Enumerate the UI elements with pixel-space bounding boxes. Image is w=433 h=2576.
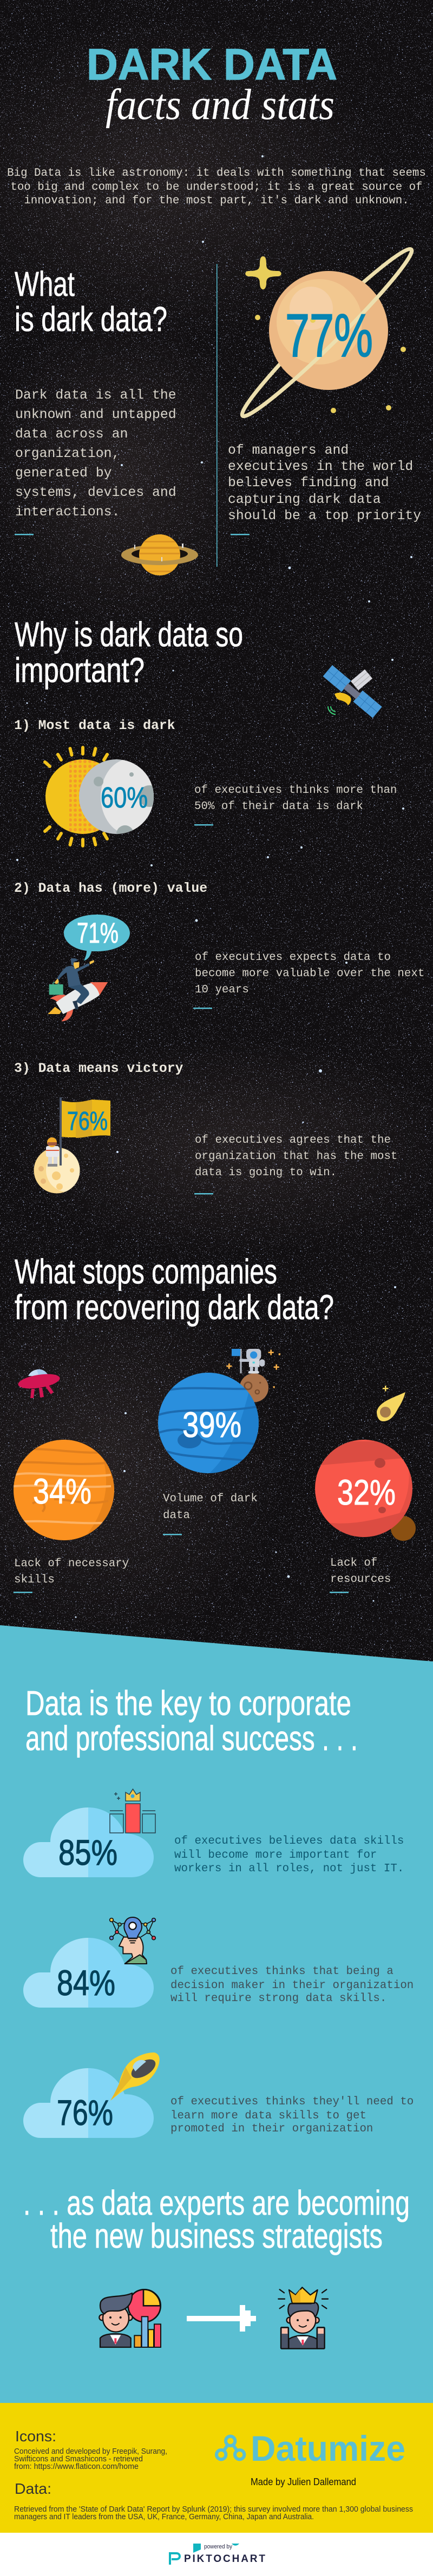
- stat: 60%: 60%: [101, 782, 148, 814]
- stat: 39%: 39%: [182, 1405, 241, 1445]
- text: icon credits: Conceived and developed by Freepik, Surang,: [14, 2447, 167, 2456]
- stat row: 76%: [23, 2052, 414, 2138]
- stat: 84%: 84%: [57, 1963, 115, 2003]
- icon: head with lightbulb and network: [110, 1917, 155, 1964]
- panel: what stops companies: [14, 1252, 417, 1593]
- description 3: of executives agrees that the: [195, 1134, 391, 1147]
- arrow: [187, 2305, 256, 2332]
- planet: blue 39%: [157, 1373, 265, 1476]
- definition text: data across an: [15, 427, 128, 442]
- icon: astronaut on asteroid: [226, 1349, 280, 1402]
- heading: what is dark data: What: [15, 264, 75, 303]
- cloud: [23, 1807, 154, 1877]
- icon: podium bars with crown: [110, 1789, 155, 1833]
- description 3: data is going to win.: [195, 1167, 337, 1179]
- stat description: capturing dark data: [228, 492, 381, 507]
- icon: flying saucer with flame tail: [110, 2052, 160, 2101]
- stat description: [228, 443, 421, 524]
- description 1: of executives thinks more than: [194, 784, 397, 797]
- icon: moon with astronaut and flag: [34, 1097, 110, 1193]
- text: data source: [14, 2505, 413, 2521]
- subheading 3: 3) Data means victory: [14, 1061, 183, 1076]
- icon: satellite: [323, 665, 382, 718]
- icon: comet: [377, 1386, 405, 1421]
- text: made by: Made by Julien Dallemand: [251, 2476, 356, 2487]
- label: lack of resources: resources: [330, 1573, 391, 1586]
- planet: orange 34%: [14, 1440, 119, 1541]
- flag: [62, 1100, 110, 1137]
- description 3: [195, 1134, 397, 1179]
- heading: what stops companies: from recovering dark data?: [15, 1288, 334, 1327]
- logo: Datumize: Datumize: [251, 2428, 405, 2468]
- description 2: [195, 951, 424, 996]
- stat description: executives in the world: [228, 459, 413, 474]
- text: icon credits: Swifticons and Smashicons - retrieved: [14, 2455, 143, 2464]
- intro text block: too big and complex to be understood; it is a great source of: [10, 181, 423, 194]
- panel: why is dark data important: [14, 615, 424, 1194]
- description: [174, 1835, 404, 1875]
- intro text block: Big Data is like astronomy: it deals with something that seems: [7, 167, 426, 180]
- stat description: should be a top priority: [228, 508, 421, 524]
- accent underline: [163, 1534, 182, 1535]
- heading: why important: [15, 615, 243, 690]
- heading: why important: important?: [15, 651, 145, 690]
- description 2: become more valuable over the next: [195, 968, 424, 980]
- description 2: 10 years: [195, 984, 249, 996]
- description: workers in all roles, not just IT.: [174, 1863, 404, 1875]
- label: lack of necessary skills: [14, 1558, 129, 1586]
- text: icon credits: [14, 2447, 167, 2471]
- heading: why important: Why is dark data so: [15, 615, 243, 654]
- description: of executives thinks they'll need to: [170, 2096, 414, 2108]
- text: data source: Retrieved from the 'State of Dark Data' Report by Splunk (2019); this survey involved more than 1,300 global business: [14, 2505, 413, 2514]
- definition text: Dark data is all the: [15, 388, 176, 403]
- description 3: organization that has the most: [195, 1150, 397, 1163]
- stat: 77%: 77%: [285, 302, 373, 369]
- label: volume of dark data: Volume of dark: [163, 1493, 258, 1505]
- powered by Piktochart: [0, 2533, 433, 2576]
- definition text: interactions.: [15, 505, 120, 520]
- cloud: [23, 1938, 154, 2008]
- label: lack of necessary skills: Lack of necessary: [14, 1558, 129, 1570]
- stat description: of managers and: [228, 443, 349, 458]
- icon: saturn: [121, 534, 198, 575]
- stat description: believes finding and: [228, 475, 389, 491]
- description: [170, 1965, 414, 2005]
- stat: 32%: 32%: [337, 1472, 396, 1512]
- heading: data is the key: [25, 1684, 358, 1758]
- label: volume of dark data: data: [163, 1509, 190, 1522]
- label: lack of resources: Lack of: [330, 1557, 377, 1570]
- icon: UFO: [17, 1369, 61, 1398]
- vertical divider: [216, 264, 218, 567]
- definition text: organization,: [15, 446, 120, 461]
- small star dots: [255, 315, 406, 413]
- icon: businessman on a rocket: [48, 958, 108, 1021]
- subheading 1: 1) Most data is dark: [14, 718, 175, 733]
- powered by Piktochart: PIKTOCHART: [184, 2553, 265, 2565]
- title: DARK DATA: DARK DATA: [87, 40, 337, 89]
- definition text: unknown and untapped: [15, 407, 176, 422]
- heading: icons: Icons:: [15, 2428, 56, 2445]
- heading: new business strategists: [23, 2183, 410, 2255]
- stat row: 84%: [23, 1917, 414, 2008]
- panel: what is dark data: [15, 241, 421, 575]
- description: learn more data skills to get: [170, 2110, 366, 2122]
- stat: 76%: 76%: [67, 1107, 108, 1136]
- subheading 2: 2) Data has (more) value: [14, 881, 207, 896]
- icon: eclipse with 60%: [45, 747, 160, 846]
- panel: data is the key (teal section): [0, 1625, 433, 2403]
- definition text: systems, devices and: [15, 485, 176, 500]
- definition text: generated by: [15, 466, 112, 481]
- stat: 76%: 76%: [57, 2092, 113, 2133]
- heading: what is dark data: [15, 264, 167, 339]
- starry space background: [0, 0, 433, 1671]
- heading: data: Data:: [15, 2480, 51, 2497]
- stat: 34%: 34%: [33, 1471, 91, 1511]
- powered by Piktochart: powered by: [204, 2544, 232, 2550]
- description 1: [194, 784, 397, 813]
- accent underline: [15, 534, 34, 535]
- description 1: 50% of their data is dark: [194, 800, 363, 813]
- icon: crowned executive: [278, 2287, 328, 2349]
- icon: four-point star: [245, 256, 281, 289]
- accent underline: [194, 1193, 213, 1194]
- cloud: [23, 2068, 154, 2138]
- intro text block: [7, 167, 426, 207]
- stat row: 85%: [23, 1789, 404, 1877]
- subtitle: facts and stats: facts and stats: [106, 81, 334, 129]
- stat: 71%: 71%: [77, 917, 119, 949]
- accent underline: [194, 824, 213, 825]
- label: lack of resources: [330, 1557, 391, 1586]
- description: promoted in their organization: [170, 2123, 373, 2135]
- label: lack of necessary skills: skills: [14, 1574, 55, 1586]
- description: decision maker in their organization: [170, 1979, 414, 1992]
- description: will require strong data skills.: [170, 1992, 386, 2005]
- accent underline: [193, 1008, 212, 1009]
- heading: what stops companies: What stops companies: [15, 1252, 277, 1291]
- label: volume of dark data: [163, 1493, 258, 1522]
- icon: speech bubble 71%: [64, 915, 130, 961]
- icon: ringed planet with 77%: [234, 241, 419, 424]
- planet: red 32% with moon: [314, 1440, 417, 1541]
- stat: 85%: 85%: [58, 1832, 117, 1872]
- description: [170, 2096, 414, 2135]
- accent underline: [231, 534, 250, 535]
- icon: analyst with charts: [99, 2289, 161, 2347]
- text: icon credits: from: https://www.flaticon.com/home: [14, 2462, 139, 2471]
- text: data source: managers and IT leaders from the USA, UK, France, Germany, China, Japan and Australia.: [14, 2513, 314, 2521]
- description: of executives thinks that being a: [170, 1965, 393, 1978]
- panel: credits footer (yellow): [0, 2403, 433, 2533]
- description: of executives believes data skills: [174, 1835, 404, 1847]
- description 2: of executives expects data to: [195, 951, 391, 964]
- description: will become more important for: [174, 1849, 377, 1862]
- heading: what stops companies: [15, 1252, 334, 1327]
- accent underline: [14, 1592, 32, 1593]
- intro text block: innovation; and for the most part, it's dark and unknown.: [24, 195, 409, 207]
- definition text: [15, 388, 176, 520]
- heading: what is dark data: is dark data?: [15, 300, 167, 339]
- accent underline: [330, 1592, 349, 1593]
